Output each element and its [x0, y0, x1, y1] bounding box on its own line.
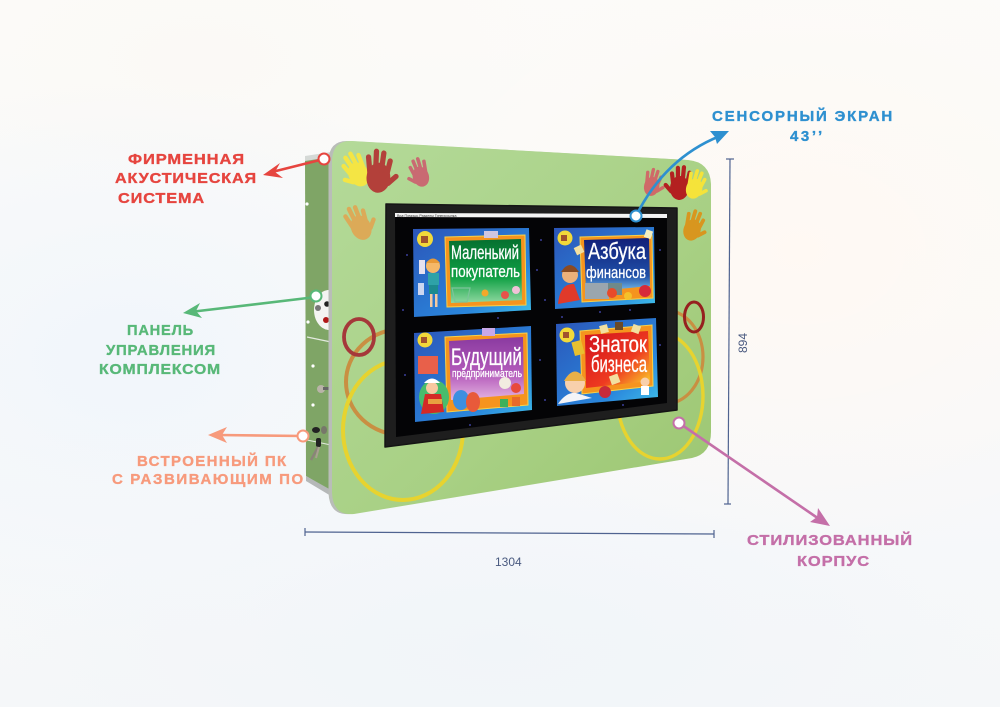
- card: Маленький покупатель: [413, 228, 531, 317]
- label: styled case: [747, 531, 913, 570]
- card: Знаток бизнеса: бизнеса: [591, 351, 647, 377]
- touch screen: [385, 204, 677, 447]
- label: speakers: АКУСТИЧЕСКАЯ: [115, 170, 257, 187]
- width dimension line: [305, 528, 714, 538]
- arrow: speakers: [263, 154, 330, 178]
- label: styled case: КОРПУС: [797, 553, 870, 570]
- label: control panel: УПРАВЛЕНИЯ: [106, 342, 216, 359]
- card: Будущий предприниматель: предприниматель: [452, 368, 522, 380]
- label: styled case: СТИЛИЗОВАННЫЙ: [747, 531, 913, 549]
- label: control panel: [99, 322, 221, 378]
- height value: 894: [736, 333, 750, 353]
- card: Маленький покупатель: покупатель: [451, 262, 520, 281]
- label: built-in PC: [112, 452, 304, 488]
- label: touch screen: 43’’: [790, 128, 823, 145]
- card: Будущий предприниматель: Будущий: [451, 344, 522, 371]
- front panel: [328, 141, 711, 514]
- card: Знаток бизнеса: [556, 318, 658, 406]
- label: speakers: ФИРМЕННАЯ: [128, 151, 245, 168]
- card: Азбука финансов: финансов: [586, 263, 646, 282]
- label: control panel: ПАНЕЛЬ: [127, 322, 194, 339]
- label: speakers: [115, 151, 257, 207]
- side wall of the case: [305, 152, 331, 496]
- arrow: styled case: [674, 418, 830, 526]
- decorative rings: [343, 302, 704, 500]
- hand prints: [335, 150, 711, 244]
- label: built-in PC: ВСТРОЕННЫЙ ПК: [137, 452, 287, 470]
- arrow: built-in PC: [208, 427, 308, 443]
- width value: 1304: [495, 555, 522, 569]
- height dimension line: [724, 159, 734, 504]
- card: Азбука финансов: Азбука: [588, 238, 646, 264]
- card: Маленький покупатель: Маленький: [451, 243, 519, 264]
- arrow: touch screen: [630, 131, 729, 222]
- label: built-in PC: С РАЗВИВАЮЩИМ ПО: [112, 471, 304, 488]
- label: touch screen: СЕНСОРНЫЙ ЭКРАН: [712, 107, 893, 125]
- label: speakers: СИСТЕМА: [118, 190, 205, 207]
- card: Знаток бизнеса: Знаток: [589, 331, 648, 357]
- control panel buttons: [314, 290, 331, 330]
- label: control panel: КОМПЛЕКСОМ: [99, 361, 221, 378]
- touch screen: Вид Помощь Разделы Гиперссылка: [397, 214, 456, 218]
- card: Будущий предприниматель: [414, 326, 532, 422]
- label: touch screen: [712, 107, 893, 145]
- arrow: control panel: [183, 290, 322, 318]
- lock and keys: [311, 385, 329, 460]
- card: Азбука финансов: [554, 227, 655, 309]
